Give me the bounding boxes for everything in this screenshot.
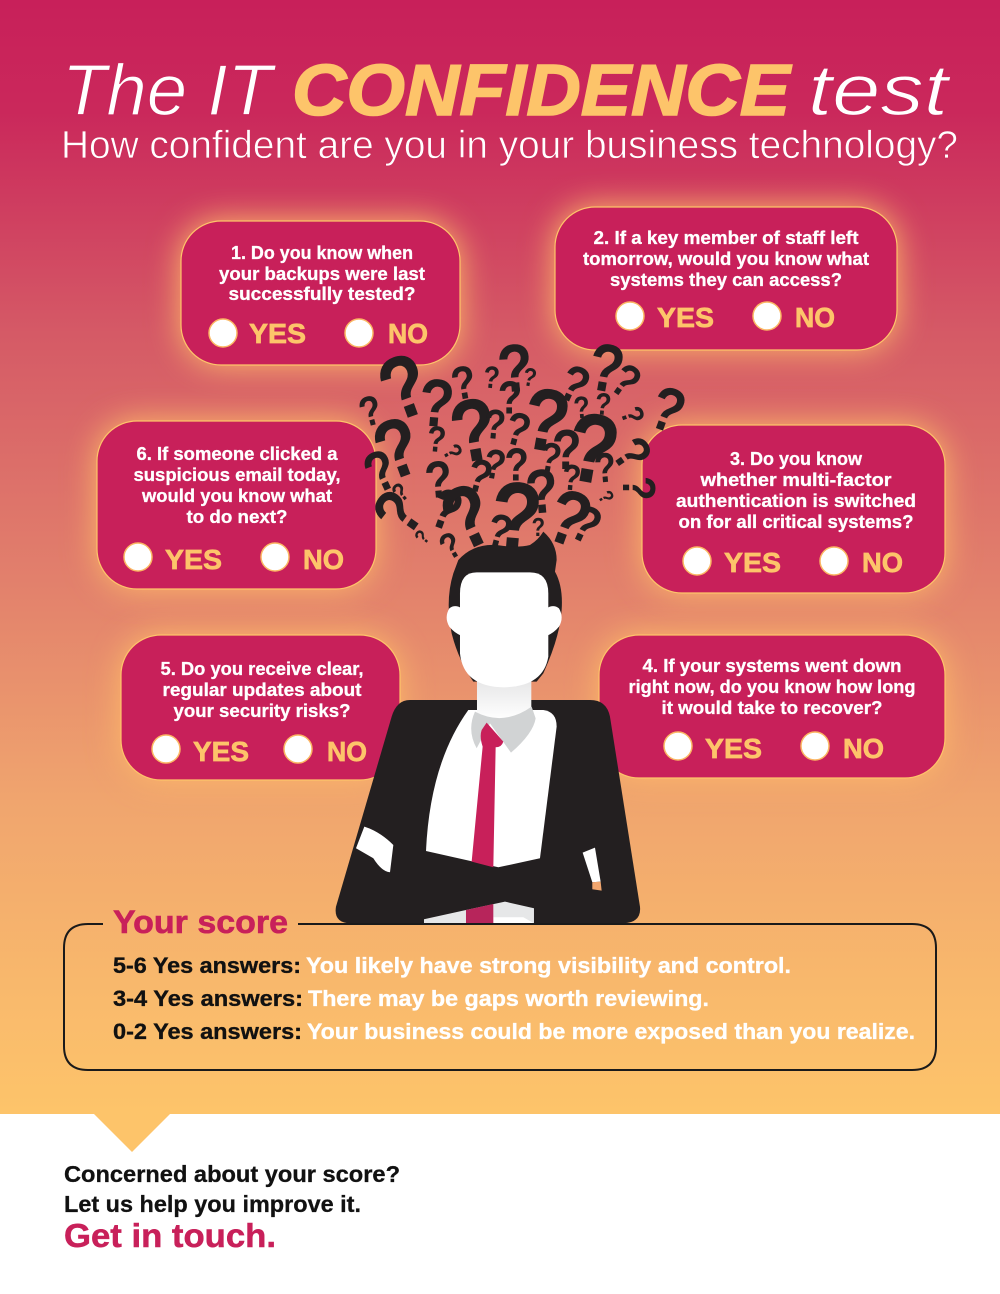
- your score panel: [64, 904, 936, 1070]
- question marks cloud: ?: [482, 361, 501, 396]
- question 1 panel: successfully tested?: [228, 284, 416, 304]
- question marks cloud: ?: [498, 373, 522, 424]
- question marks cloud: ?: [536, 434, 565, 483]
- question 5 panel: regular updates about: [162, 680, 362, 700]
- call to action: Get in touch.: [64, 1217, 276, 1254]
- your score panel: You likely have strong visibility and control.: [306, 953, 791, 978]
- question marks cloud: ?: [432, 524, 469, 569]
- question marks cloud: ?: [640, 372, 695, 448]
- call to action: Concerned about your score?: [64, 1161, 400, 1187]
- question marks cloud: ?: [386, 477, 415, 508]
- question 4 panel: 4. If your systems went down: [642, 656, 902, 676]
- question 3 panel: 3. Do you know: [730, 449, 863, 469]
- question marks cloud: ?: [613, 402, 651, 429]
- question marks cloud: ?: [535, 471, 603, 566]
- question 2 panel: NO: [795, 302, 835, 333]
- question 2 panel: tomorrow, would you know what: [583, 249, 869, 269]
- question marks cloud: ?: [594, 387, 613, 423]
- question marks cloud: ?: [550, 353, 599, 417]
- question marks cloud: ?: [600, 427, 663, 482]
- subtitle: How confident are you in your business technology?: [61, 124, 958, 167]
- question 5 panel: 5. Do you receive clear,: [160, 659, 364, 679]
- question marks cloud: ?: [416, 365, 457, 443]
- question marks cloud: ?: [436, 439, 468, 465]
- question 3 panel: [642, 425, 945, 593]
- question 4 panel: [599, 635, 945, 778]
- question 2 panel: YES: [657, 302, 714, 333]
- question marks cloud: ?: [426, 463, 510, 572]
- footer pointer triangle: [94, 1114, 170, 1152]
- your score panel: Your business could be more exposed than you realize.: [307, 1019, 915, 1044]
- question 4 panel: it would take to recover?: [662, 698, 882, 718]
- question marks cloud: ?: [425, 419, 448, 461]
- question marks cloud: ?: [354, 387, 387, 437]
- question 6 panel: YES: [165, 544, 222, 575]
- question marks cloud: ?: [572, 391, 591, 426]
- question marks cloud: ?: [593, 487, 619, 508]
- question 2 panel: systems they can access?: [610, 270, 842, 290]
- your score panel: 5-6 Yes answers:: [113, 953, 301, 978]
- title: The IT: [62, 51, 277, 131]
- question 4 panel: right now, do you know how long: [628, 677, 916, 697]
- question marks cloud: ?: [447, 356, 480, 411]
- question marks cloud: ?: [560, 457, 583, 499]
- title: CONFIDENCE: [292, 51, 792, 131]
- call to action: Let us help you improve it.: [64, 1191, 361, 1217]
- question marks cloud: ?: [461, 449, 498, 505]
- call to action: [64, 1161, 400, 1254]
- question 3 panel: whether multi-factor: [699, 470, 892, 490]
- question marks cloud: ?: [592, 445, 618, 492]
- question 6 panel: 6. If someone clicked a: [136, 444, 339, 464]
- question marks cloud: ?: [561, 493, 610, 557]
- question marks cloud: ?: [422, 450, 455, 510]
- question marks cloud: ?: [480, 441, 509, 490]
- question 5 panel: your security risks?: [174, 701, 350, 721]
- question marks cloud: ?: [504, 440, 529, 491]
- question 1 panel: YES: [249, 318, 306, 349]
- question marks cloud: ?: [354, 437, 408, 507]
- question 6 panel: [97, 421, 376, 589]
- question marks cloud: ?: [601, 354, 650, 410]
- question marks cloud: ?: [442, 378, 505, 483]
- question marks cloud: ?: [582, 329, 630, 409]
- question 1 panel: your backups were last: [219, 264, 425, 284]
- question marks cloud: ?: [358, 477, 439, 549]
- question marks cloud: ?: [365, 333, 443, 441]
- question 3 panel: YES: [724, 547, 781, 578]
- your score panel: There may be gaps worth reviewing.: [308, 986, 709, 1011]
- your score panel: 3-4 Yes answers:: [113, 986, 303, 1011]
- question marks cloud: ?: [421, 475, 471, 545]
- question marks cloud: ?: [410, 526, 435, 549]
- your score panel: 0-2 Yes answers:: [113, 1019, 302, 1044]
- question marks cloud: ?: [532, 514, 545, 543]
- question marks cloud: ?: [361, 398, 434, 500]
- title: test: [808, 51, 952, 131]
- question marks cloud: ?: [521, 363, 539, 393]
- question marks cloud: ?: [552, 419, 582, 482]
- question marks cloud: ?: [499, 402, 536, 458]
- question 2 panel: 2. If a key member of staff left: [594, 228, 858, 248]
- question 6 panel: would you know what: [141, 486, 332, 506]
- question 3 panel: NO: [862, 547, 903, 578]
- your score panel: Your score: [113, 904, 288, 940]
- question 3 panel: authentication is switched: [676, 491, 916, 511]
- question 5 panel: YES: [193, 736, 249, 767]
- question marks cloud: ?: [482, 401, 508, 449]
- question 1 panel: [181, 221, 460, 365]
- question 1 panel: NO: [388, 318, 428, 349]
- question 4 panel: YES: [705, 733, 762, 764]
- question marks cloud: ?: [486, 460, 547, 575]
- question marks cloud: ?: [522, 456, 561, 528]
- question 5 panel: [121, 635, 400, 780]
- question marks cloud: ?: [612, 476, 664, 501]
- question 1 panel: 1. Do you know when: [231, 243, 413, 263]
- question 3 panel: on for all critical systems?: [678, 512, 914, 532]
- question 2 panel: [555, 207, 897, 350]
- question 6 panel: suspicious email today,: [134, 465, 340, 485]
- question 6 panel: NO: [303, 544, 344, 575]
- question marks cloud: ?: [515, 368, 578, 473]
- question marks cloud: [354, 329, 695, 575]
- man in suit with crossed arms: [336, 532, 640, 923]
- question 4 panel: NO: [843, 733, 884, 764]
- question marks cloud: ?: [558, 390, 628, 508]
- question marks cloud: ?: [494, 330, 536, 408]
- question 6 panel: to do next?: [186, 507, 288, 527]
- title: [62, 51, 952, 131]
- question 5 panel: NO: [327, 736, 367, 767]
- question marks cloud: ?: [481, 504, 518, 560]
